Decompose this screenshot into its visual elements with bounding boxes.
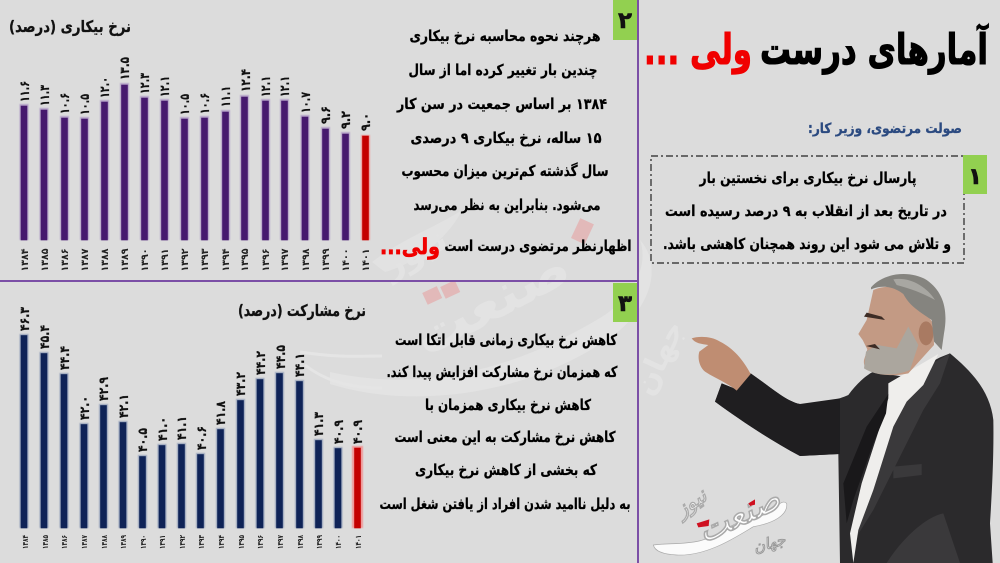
value labels: ۱۱.۶ — [18, 81, 33, 102]
badge 2: ۲ — [618, 8, 632, 34]
year labels: ۱۳۹۰ — [139, 535, 148, 549]
value labels: ۱۰.۶ — [198, 93, 213, 114]
commentary text: سال گذشته کم‌ترین میزان محسوب — [402, 162, 608, 180]
value labels: ۹.۰ — [359, 113, 374, 131]
beard — [864, 327, 918, 375]
jacket — [715, 353, 993, 563]
value labels: ۱۲.۱ — [158, 76, 173, 97]
value labels: ۱۲.۳ — [138, 73, 153, 94]
year labels: ۱۳۹۱ — [158, 535, 167, 549]
value labels: ۱۰.۷ — [299, 92, 314, 113]
year labels: ۱۳۹۵ — [240, 248, 251, 272]
panel 1: quote box — [651, 155, 987, 263]
mouth and brow — [864, 313, 885, 349]
quote text: پارسال نرخ بیکاری برای نخستین بار — [699, 169, 916, 188]
value labels: ۴۱.۸ — [214, 401, 229, 425]
year labels: ۱۳۸۶ — [60, 535, 69, 549]
year labels — [20, 248, 372, 272]
commentary text: کاهش نرخ بیکاری همزمان با — [425, 396, 591, 414]
value labels: ۴۴.۵ — [274, 345, 289, 369]
illustration: minister pointing — [692, 274, 993, 563]
year labels: ۱۳۹۰ — [140, 248, 151, 272]
bars — [20, 334, 363, 528]
badge 3: ۳ — [618, 291, 632, 317]
year labels: ۱۳۸۷ — [80, 248, 91, 272]
collar gap — [843, 394, 888, 523]
value labels: ۴۱.۰ — [156, 417, 171, 441]
quote text: در تاریخ بعد از انقلاب به ۹ درصد رسیده است — [665, 202, 947, 220]
commentary text: ۱۳۸۴ بر اساس جمعیت در سن کار — [396, 95, 607, 113]
hair — [871, 274, 945, 350]
year labels: ۱۴۰۰ — [341, 248, 352, 272]
watermark: news logo: صنعت — [402, 234, 581, 370]
year labels: ۱۳۸۹ — [120, 248, 131, 272]
commentary text: کاهش نرخ مشارکت به این معنی است — [394, 428, 616, 446]
jacket lapel and pocket — [857, 353, 960, 563]
year labels: ۱۳۹۹ — [315, 535, 324, 549]
ear — [919, 321, 933, 345]
value labels — [18, 57, 374, 131]
year labels: ۱۳۹۶ — [256, 535, 265, 549]
year labels: ۱۳۸۸ — [100, 248, 111, 272]
hair highlights — [893, 279, 935, 300]
year labels: ۱۴۰۱ — [354, 535, 363, 549]
badge 1 — [963, 155, 987, 194]
year labels: ۱۳۹۲ — [180, 248, 191, 272]
year labels: ۱۳۸۴ — [20, 248, 31, 272]
commentary text: که همزمان نرخ مشارکت افزایش پیدا کند. — [386, 363, 618, 382]
value labels: ۴۰.۹ — [351, 420, 366, 444]
logo word: Jahan: جهان — [751, 530, 788, 557]
year labels: ۱۳۹۳ — [197, 535, 206, 549]
logo swash — [653, 502, 787, 555]
commentary text — [380, 27, 632, 260]
value labels: ۴۵.۴ — [38, 325, 53, 349]
year labels: ۱۳۹۵ — [237, 535, 246, 549]
value labels: ۴۳.۲ — [234, 372, 249, 396]
value labels: ۴۶.۳ — [18, 307, 33, 331]
value labels: ۴۲.۹ — [97, 377, 112, 401]
year labels: ۱۳۹۸ — [296, 535, 305, 549]
year labels — [21, 535, 363, 549]
value labels: ۱۳.۵ — [118, 57, 133, 80]
year labels: ۱۳۹۴ — [221, 248, 232, 272]
commentary text — [380, 331, 630, 513]
bars — [20, 83, 370, 240]
logo word: News: نیوز — [668, 483, 713, 524]
divider lines — [0, 0, 639, 563]
shirt — [850, 354, 938, 563]
year labels: ۱۳۸۷ — [80, 535, 89, 549]
value labels: ۴۴.۲ — [254, 351, 269, 375]
chart: participation rate — [18, 301, 366, 549]
value labels: ۴۴.۴ — [58, 346, 73, 370]
value labels: ۹.۶ — [319, 106, 334, 124]
speaker name: صولت مرتضوی، وزیر کار: — [808, 121, 962, 137]
value labels: ۱۲.۰ — [98, 77, 113, 98]
value labels: ۱۱.۱ — [219, 86, 234, 107]
value labels: ۴۰.۹ — [332, 420, 347, 444]
logo red dots — [697, 499, 755, 527]
year labels: ۱۳۹۶ — [261, 248, 272, 272]
value labels: ۴۰.۵ — [136, 428, 151, 452]
value labels: ۱۱.۳ — [38, 85, 53, 106]
value labels: ۱۰.۵ — [78, 94, 93, 115]
chart title: نرخ مشارکت (درصد) — [238, 301, 366, 320]
commentary text: کاهش نرخ بیکاری زمانی قابل اتکا است — [395, 331, 617, 349]
commentary text: به دلیل ناامید شدن افراد از یافتن شغل است — [380, 495, 630, 513]
year labels: ۱۳۹۹ — [321, 248, 332, 272]
badge 1: ۱ — [968, 164, 982, 190]
value labels: ۱۰.۶ — [58, 93, 73, 114]
year labels: ۱۳۹۷ — [280, 248, 291, 272]
year labels: ۱۳۸۴ — [21, 535, 30, 549]
commentary text: ۱۵ ساله، نرخ بیکاری ۹ درصدی — [410, 129, 602, 147]
year labels: ۱۳۸۹ — [119, 535, 128, 549]
commentary text: هرچند نحوه محاسبه نرخ بیکاری — [410, 27, 600, 46]
chart title: نرخ بیکاری (درصد) — [9, 17, 131, 36]
year labels: ۱۴۰۰ — [334, 535, 343, 549]
watermark: news logo: نیوز — [374, 219, 454, 287]
value labels: ۱۲.۴ — [239, 69, 254, 92]
value labels: ۴۴.۱ — [293, 353, 308, 377]
face — [858, 287, 934, 375]
commentary text: چندین بار تغییر کرده اما از سال — [408, 61, 598, 80]
value labels: ۴۱.۱ — [175, 416, 190, 440]
value labels: ۱۲.۱ — [259, 76, 274, 97]
badge 3 — [613, 283, 637, 322]
jacket sleeve shading — [715, 373, 840, 456]
title — [644, 24, 989, 75]
value labels — [18, 307, 366, 452]
panel 3: participation commentary — [380, 283, 637, 513]
panel 2: unemployment commentary — [380, 0, 637, 260]
year labels: ۱۳۹۴ — [217, 535, 226, 549]
chart: unemployment rate — [9, 17, 374, 272]
watermark: news logo: جهان — [627, 315, 692, 401]
year labels: ۱۳۸۵ — [40, 248, 51, 272]
commentary text: اظهارنظر مرتضوی درست است — [444, 237, 632, 255]
logo: Jahan Sanat News — [653, 478, 788, 557]
year labels: ۱۳۹۲ — [178, 535, 187, 549]
value labels: ۱۰.۵ — [178, 94, 193, 115]
year labels: ۱۳۹۳ — [200, 248, 211, 272]
year labels: ۱۳۹۷ — [276, 535, 285, 549]
year labels: ۱۳۸۸ — [100, 535, 109, 549]
badge 2 — [613, 0, 637, 40]
value labels: ۴۰.۶ — [195, 426, 210, 450]
year labels: ۱۳۹۱ — [160, 248, 171, 272]
year labels: ۱۳۸۶ — [60, 248, 71, 272]
value labels: ۴۲.۱ — [117, 394, 132, 418]
logo word: Sanat: صنعت — [691, 478, 788, 551]
title: ولی ... — [644, 25, 752, 75]
quote text — [663, 169, 951, 254]
value labels: ۴۲.۰ — [78, 396, 93, 420]
hand — [692, 337, 751, 391]
year labels: ۱۳۹۸ — [301, 248, 312, 272]
year labels: ۱۴۰۱ — [361, 248, 372, 272]
value labels: ۴۱.۳ — [312, 412, 327, 436]
value labels: ۹.۲ — [339, 111, 354, 129]
commentary text: می‌شود. بنابراین به نظر می‌رسد — [414, 196, 600, 214]
commentary text: که بخشی از کاهش نرخ بیکاری — [415, 461, 597, 479]
watermark: news logo — [300, 210, 692, 401]
year labels: ۱۳۸۵ — [41, 535, 50, 549]
commentary text: ولی... — [380, 235, 440, 260]
value labels: ۱۲.۱ — [278, 76, 293, 97]
